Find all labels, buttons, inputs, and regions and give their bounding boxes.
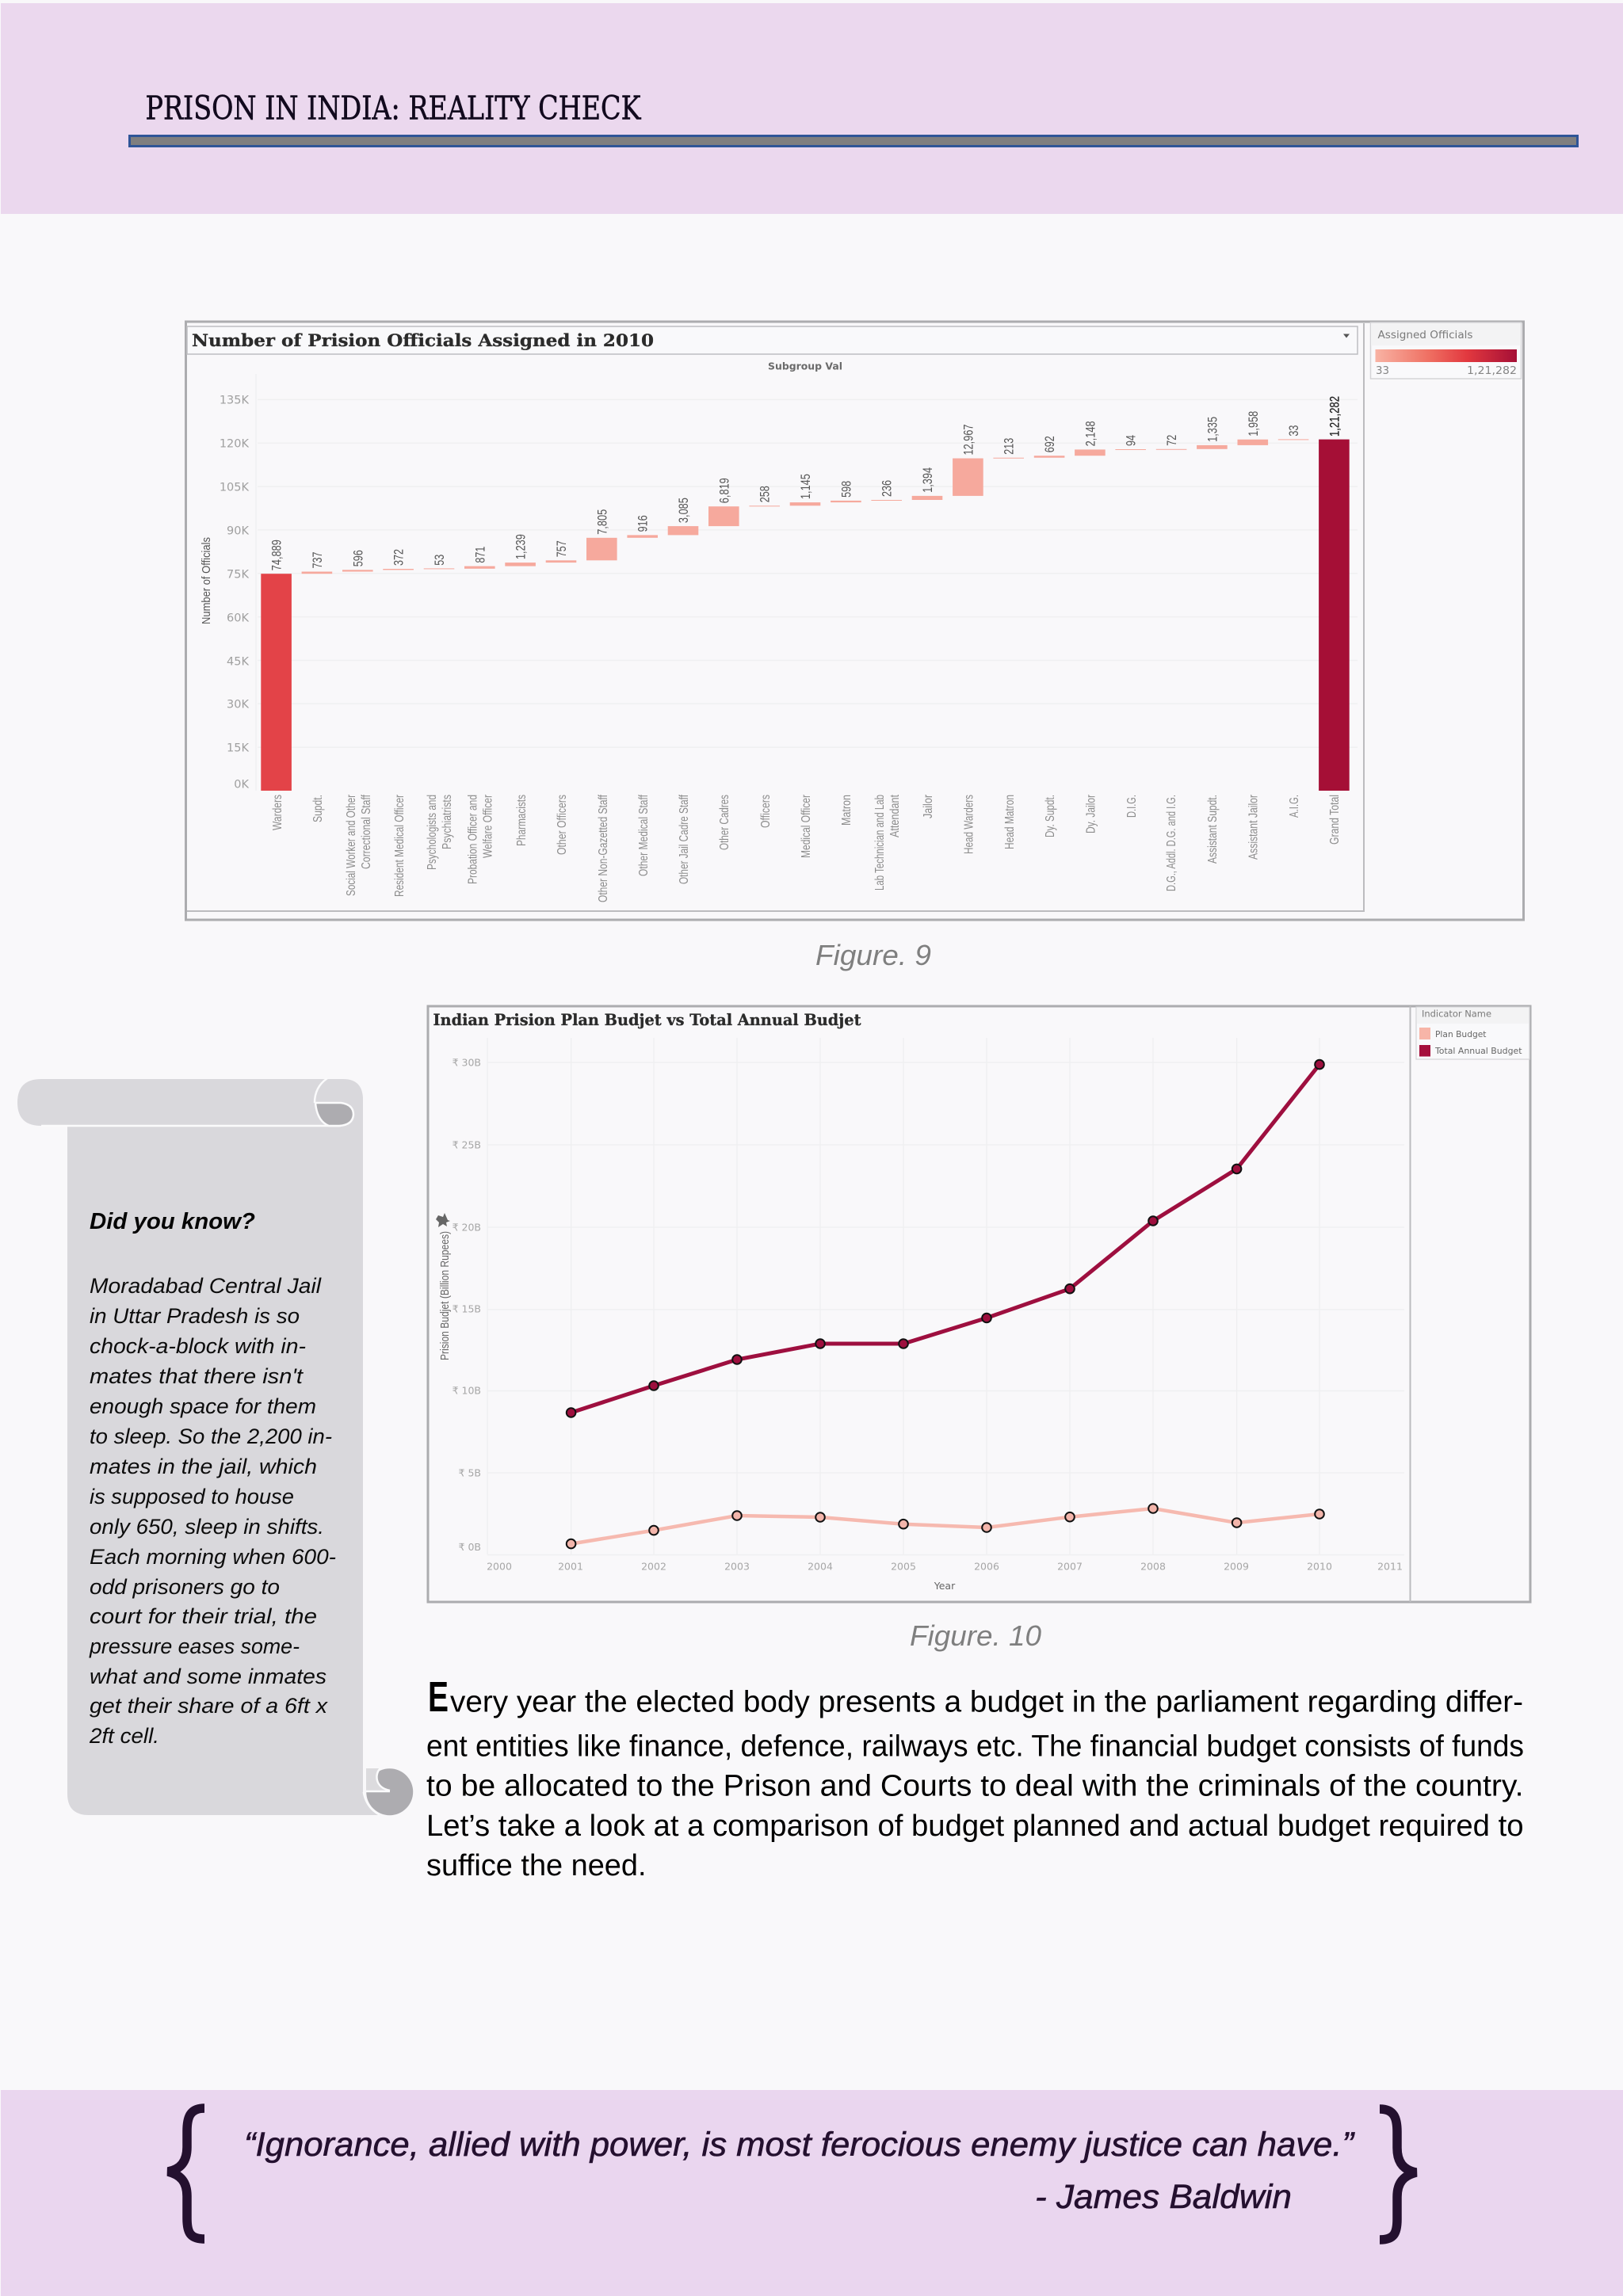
category labels: Dy. Jailor [1084,795,1098,833]
bar value labels: 1,394 [920,467,935,493]
y axis labels: ₹ 25B [453,1139,481,1150]
scroll text: Moradabad Central Jail [90,1274,322,1298]
scroll text [89,1274,336,1748]
bar value labels: 2,148 [1083,421,1098,446]
bar value labels: 596 [350,550,365,566]
bar value labels: 1,145 [798,474,813,499]
colour legend: 1,21,282 [1467,365,1517,377]
legend [1416,1007,1529,1059]
category labels: Warders [271,795,285,830]
category labels: D.G., Addl. D.G. and I.G. [1165,795,1178,891]
line: plan budget [567,1504,1324,1548]
x axis labels: 2002 [641,1561,666,1572]
category labels: Resident Medical Officer [393,795,407,897]
colour legend [1371,322,1522,379]
x axis labels [487,1561,1403,1592]
y axis title: Prision Budjet (Billion Rupees) [439,1231,452,1360]
category labels: Head Matron [1003,795,1017,849]
bar value labels: 3,085 [676,498,691,523]
quote text: “Ignorance, allied with power, is most ferocious enemy justice can have.” [244,2126,1355,2164]
scroll text: mates in the jail, which [90,1455,317,1478]
category labels: Attendant [888,794,902,837]
category labels: Psychiatrists [441,795,454,849]
category labels: Other Jail Cadre Staff [678,794,691,884]
legend: Indicator Name [1422,1008,1491,1019]
scroll text: to sleep. So the 2,200 in- [90,1425,332,1448]
category labels: Other Non-Gazetted Staff [597,794,610,902]
category labels: A.I.G. [1288,795,1301,818]
body paragraph: suffice the need. [426,1849,647,1882]
x axis labels: 2005 [891,1561,916,1572]
x axis labels: 2001 [558,1561,583,1572]
category labels: Social Worker and Other [345,795,358,896]
bar value labels: 916 [636,515,651,532]
bar value labels: 598 [838,481,854,498]
title: PRISON IN INDIA: REALITY CHECK [146,89,642,127]
scroll text: only 650, sleep in shifts. [90,1515,324,1539]
bar value labels: 372 [391,549,407,566]
panel: prison officials waterfall chart [185,322,1523,920]
caption: figure 10: Figure. 10 [910,1619,1041,1652]
panel: budget line chart [428,1006,1530,1602]
body paragraph: very year the elected body presents a budget in the parliament regarding differ- [450,1686,1523,1719]
scroll text: chock-a-block with in- [90,1334,306,1358]
legend: Plan Budget [1435,1029,1487,1039]
category labels: Pharmacists [515,795,529,846]
bar value labels: 33 [1286,425,1301,437]
top curl [315,1078,353,1126]
x axis labels: 2011 [1377,1561,1403,1572]
y axis labels: 120K [220,437,249,450]
line: total annual budget [567,1060,1324,1417]
title rule [130,136,1577,146]
gridlines [487,1038,1404,1554]
category labels: Assistant Supdt. [1206,795,1220,864]
bar value labels: 757 [554,540,569,557]
quote attribution: - James Baldwin [1035,2178,1292,2216]
y axis labels: ₹ 5B [459,1467,481,1478]
category labels: Probation Officer and [466,795,480,884]
y axis labels: 60K [227,612,249,624]
y axis labels: 30K [227,699,249,711]
category labels: Correctional Staff [360,794,373,869]
scroll text: in Uttar Pradesh is so [90,1304,300,1328]
x axis labels: Year [934,1580,956,1592]
category labels: Head Warders [962,795,976,854]
y axis labels: 0K [234,778,249,791]
caption: figure 9: Figure. 9 [815,939,931,971]
category labels: Grand Total [1328,795,1342,845]
y axis labels: ₹ 15B [453,1302,481,1315]
y axis labels [453,1057,481,1553]
bar value labels: 72 [1164,435,1179,446]
bar value labels: 692 [1042,436,1057,452]
colour legend: 33 [1376,365,1389,377]
bar value labels: 53 [432,555,447,566]
x axis labels: 2000 [487,1561,512,1572]
y axis labels: ₹ 10B [453,1385,481,1396]
bar value labels: 871 [472,547,487,563]
bar value labels: 7,805 [594,509,609,535]
bar value labels: 258 [758,486,773,502]
scroll text: odd prisoners go to [90,1575,280,1599]
category labels: Dy. Supdt. [1044,795,1057,837]
y axis labels: 15K [227,742,249,754]
y axis labels: 135K [220,395,249,407]
panel: did you know scroll [17,1078,413,1815]
bar value labels: 1,239 [514,534,529,559]
chart title box [187,326,1358,354]
category labels: Psychologists and [426,795,439,870]
x axis labels: 2010 [1307,1561,1332,1572]
y axis labels [220,395,249,791]
bar value labels: 1,958 [1246,411,1261,437]
scroll text: Each morning when 600- [90,1545,336,1569]
bar value labels [269,396,1342,570]
colour legend: Assigned Officials [1377,330,1473,341]
scroll top roll [17,1079,363,1126]
bottom curl [363,1768,413,1815]
category labels: D.I.G. [1125,795,1139,818]
category labels: Assistant Jailor [1247,795,1260,860]
y axis labels: ₹ 0B [459,1541,481,1553]
column header: Subgroup Val [768,360,842,372]
header band [1,3,1623,214]
y axis labels: 45K [227,656,249,669]
category labels: Matron [840,795,854,826]
bar value labels: 213 [1002,438,1017,455]
category labels: Officers [759,795,773,828]
x axis labels: 2008 [1140,1561,1166,1572]
bar value labels: 6,819 [716,478,731,503]
gridlines [256,374,1358,791]
body paragraph: ent entities like finance, defence, railways etc. The financial budget consists of funds [426,1730,1524,1764]
body paragraph [426,1673,1524,1882]
chart title: Indian Prision Plan Budjet vs Total Annual Budjet [433,1011,861,1029]
bar value labels: 94 [1124,435,1139,446]
category labels: Other Cadres [718,795,731,850]
y axis labels: ₹ 30B [453,1057,481,1068]
x axis labels: 2003 [724,1561,750,1572]
y axis labels: 105K [220,482,249,494]
scroll text: 2ft cell. [89,1724,159,1748]
scroll text: what and some inmates [90,1665,327,1688]
bar value labels: 12,967 [960,425,976,455]
x axis labels: 2009 [1224,1561,1249,1572]
category labels [271,794,1342,902]
scroll text: court for their trial, the [90,1604,317,1628]
bar value labels: 74,889 [269,540,285,570]
footer quote band [1,2090,1623,2296]
scroll heading: Did you know? [90,1209,255,1234]
scroll text: is supposed to house [90,1485,294,1508]
category labels: Other Officers [556,795,569,855]
icon: left brace [168,2108,204,2239]
bar value labels: 1,21,282 [1327,396,1342,437]
bars [261,439,1350,791]
body paragraph: E [428,1673,449,1721]
bar value labels: 236 [880,480,895,497]
chart title box: Number of Prision Officials Assigned in 2010 [192,330,654,350]
x axis labels: 2006 [974,1561,999,1572]
x axis labels: 2007 [1057,1561,1083,1572]
category labels: Lab Technician and Lab [873,795,887,891]
category labels: Other Medical Staff [637,794,651,876]
bar value labels: 737 [310,551,325,569]
scroll text: get their share of a 6ft x [90,1694,329,1718]
category labels: Welfare Officer [482,795,495,858]
body paragraph: Let’s take a look at a comparison of budget planned and actual budget required to [426,1810,1523,1843]
bar value labels: 1,335 [1205,417,1220,442]
category labels: Medical Officer [800,795,813,858]
scroll text: enough space for them [90,1394,316,1418]
category labels: Jailor [922,795,935,818]
scroll text: pressure eases some- [89,1634,300,1658]
y axis labels: 75K [227,569,249,582]
y axis title: Number of Officials [200,537,213,624]
x axis labels: 2004 [808,1561,833,1572]
y axis labels: ₹ 20B [453,1222,481,1233]
icon: pin [436,1213,450,1227]
y axis labels: 90K [227,524,249,537]
category labels: Supdt. [311,795,325,822]
scroll text: mates that there isn't [90,1364,304,1388]
scroll body [67,1126,380,1815]
legend: Total Annual Budget [1434,1046,1522,1056]
body paragraph: to be allocated to the Prison and Courts to deal with the criminals of the country. [426,1770,1523,1803]
icon: right brace [1380,2109,1416,2240]
